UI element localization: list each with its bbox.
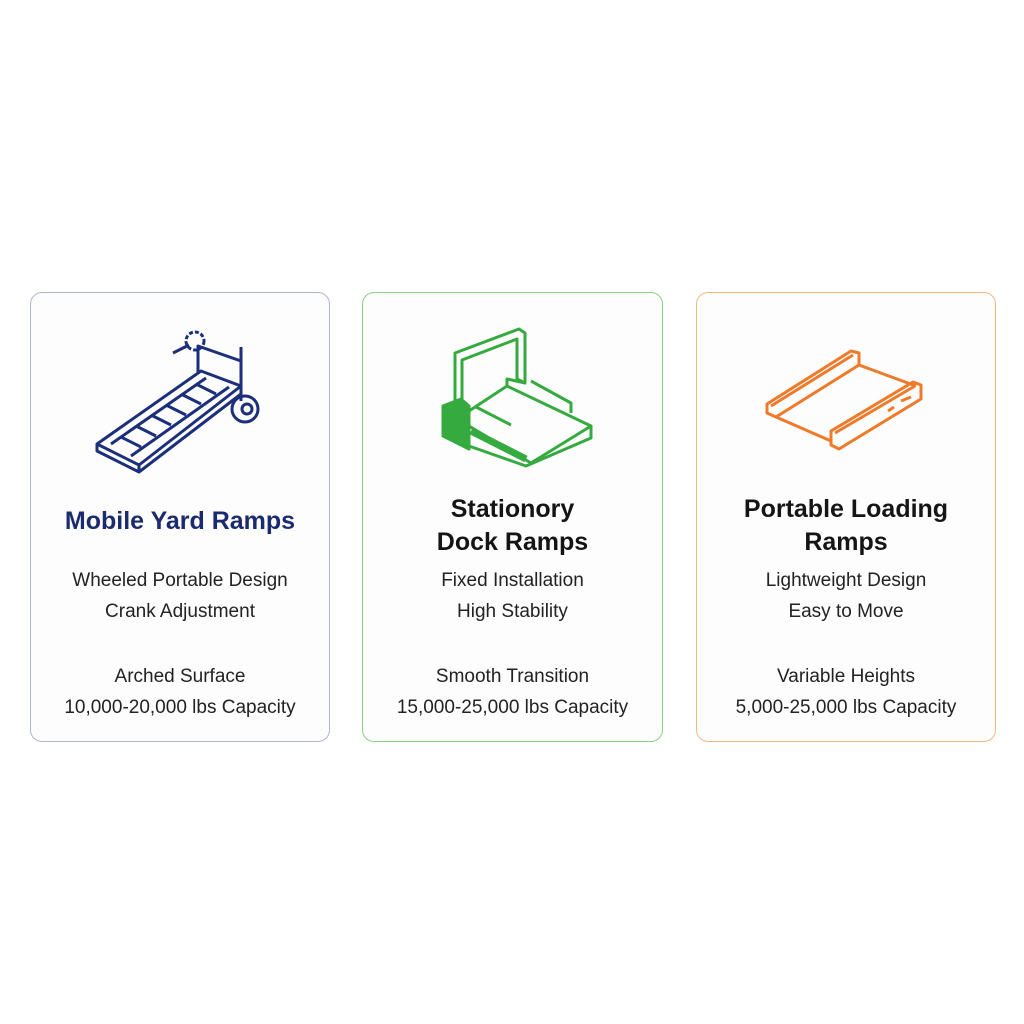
icon: portable ramp [766,350,922,450]
text: features: Lightweight Design [766,570,926,591]
text: features [441,570,584,622]
text: specs: 5,000-25,000 lbs Capacity [736,697,956,718]
text: features: Wheeled Portable Design [72,570,288,591]
heading: Dock Ramps [437,528,588,556]
text: features: Crank Adjustment [105,601,255,622]
icon: mobile ramp [95,330,260,474]
text: features [766,570,926,622]
icon: dock ramp [442,328,592,468]
heading [437,495,588,556]
text: features [72,570,288,622]
heading: Ramps [804,528,888,556]
heading: Stationory [451,495,574,523]
text: specs [736,666,956,718]
text: specs: 15,000-25,000 lbs Capacity [397,697,628,718]
heading [744,495,948,556]
heading: Portable Loading [744,495,948,523]
text: specs [397,666,628,718]
panel: mobile yard ramps [30,292,330,742]
text: specs [64,666,296,718]
text: features: Easy to Move [788,601,904,622]
text: features: High Stability [457,601,568,622]
text: specs: Arched Surface [115,666,245,687]
heading: Mobile Yard Ramps [65,507,295,535]
panel: portable loading ramps [696,292,996,742]
text: features: Fixed Installation [441,570,584,591]
text: specs: Variable Heights [777,666,915,687]
text: specs: 10,000-20,000 lbs Capacity [64,697,296,718]
panel: stationary dock ramps [362,292,663,742]
text: specs: Smooth Transition [436,666,589,687]
